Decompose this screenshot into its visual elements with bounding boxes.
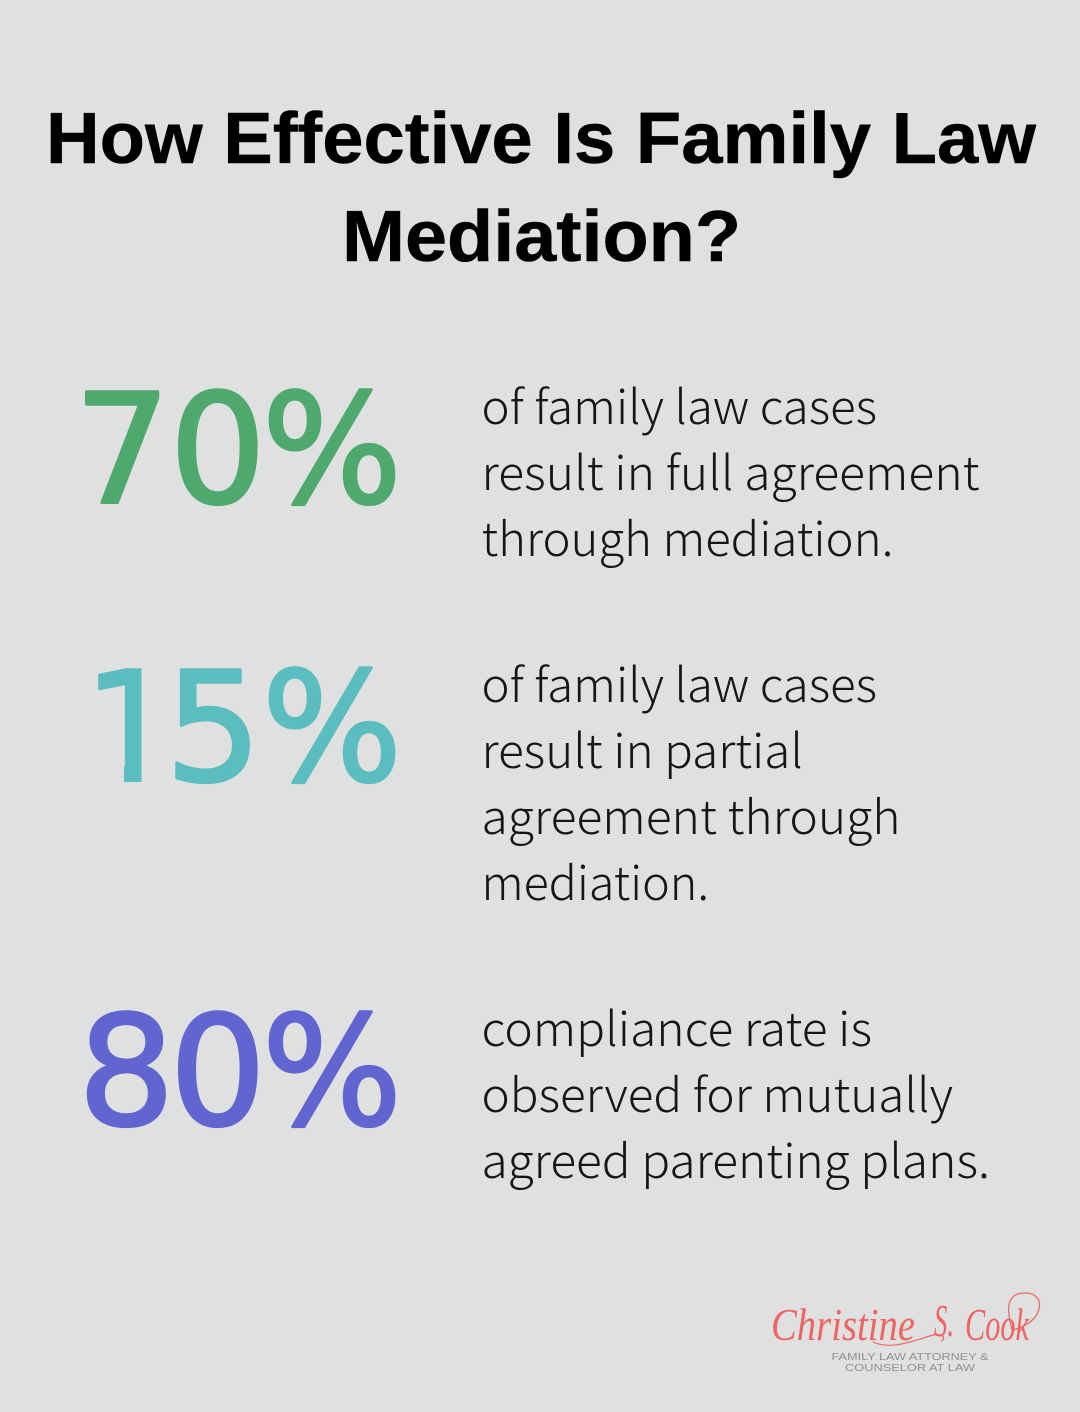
- number: 80%: %: [262, 984, 402, 1160]
- text: partial agreement description: mediation.: [482, 845, 709, 914]
- number: 80%: 8: [78, 984, 175, 1160]
- text: compliance description: observed for mutually: [482, 1057, 953, 1126]
- logo: Christine S. Cook: Cook: [965, 1299, 1030, 1350]
- stat: 70% full agreement: [74, 362, 980, 570]
- text: partial agreement description: agreement through: [482, 779, 900, 848]
- text: compliance description: [482, 991, 990, 1192]
- number: 70%: [74, 362, 402, 538]
- number: 70%: 0: [170, 362, 266, 538]
- logo: Christine S. Cook: Christine: [771, 1299, 915, 1350]
- number: 15%: [98, 666, 396, 784]
- logo: Christine S. Cook: [771, 1293, 1040, 1374]
- number: 80%: [78, 984, 402, 1160]
- text: full agreement description: [482, 369, 980, 570]
- number: 15%: 5: [165, 640, 262, 816]
- text: partial agreement description: of family law cases: [482, 647, 877, 716]
- number: 80%: 0: [170, 984, 266, 1160]
- stat: 15% partial agreement: [98, 664, 896, 900]
- text: full agreement description: result in full agreement: [482, 435, 980, 504]
- title: Mediation?: [342, 197, 741, 277]
- text: full agreement description: of family law cases: [482, 369, 877, 438]
- stat: 80% compliance: [78, 984, 990, 1192]
- logo: Christine S. Cook: FAMILY LAW ATTORNEY &: [832, 1351, 988, 1363]
- title: How Effective Is Family Law: [46, 99, 1037, 179]
- logo: Christine S. Cook: COUNSELOR AT LAW: [845, 1362, 975, 1374]
- number: 15%: %: [262, 640, 402, 816]
- number: 15%: 1: [83, 640, 180, 816]
- text: partial agreement description: [482, 647, 900, 914]
- text: full agreement description: through mediation.: [482, 501, 894, 570]
- text: partial agreement description: result in partial: [482, 713, 803, 782]
- number: 70%: 7: [74, 362, 171, 538]
- logo: Christine S. Cook: S.: [934, 1295, 954, 1346]
- text: compliance description: agreed parenting plans.: [482, 1123, 990, 1192]
- number: 70%: %: [262, 362, 402, 538]
- text: compliance description: compliance rate is: [482, 991, 872, 1060]
- title: [46, 99, 1037, 277]
